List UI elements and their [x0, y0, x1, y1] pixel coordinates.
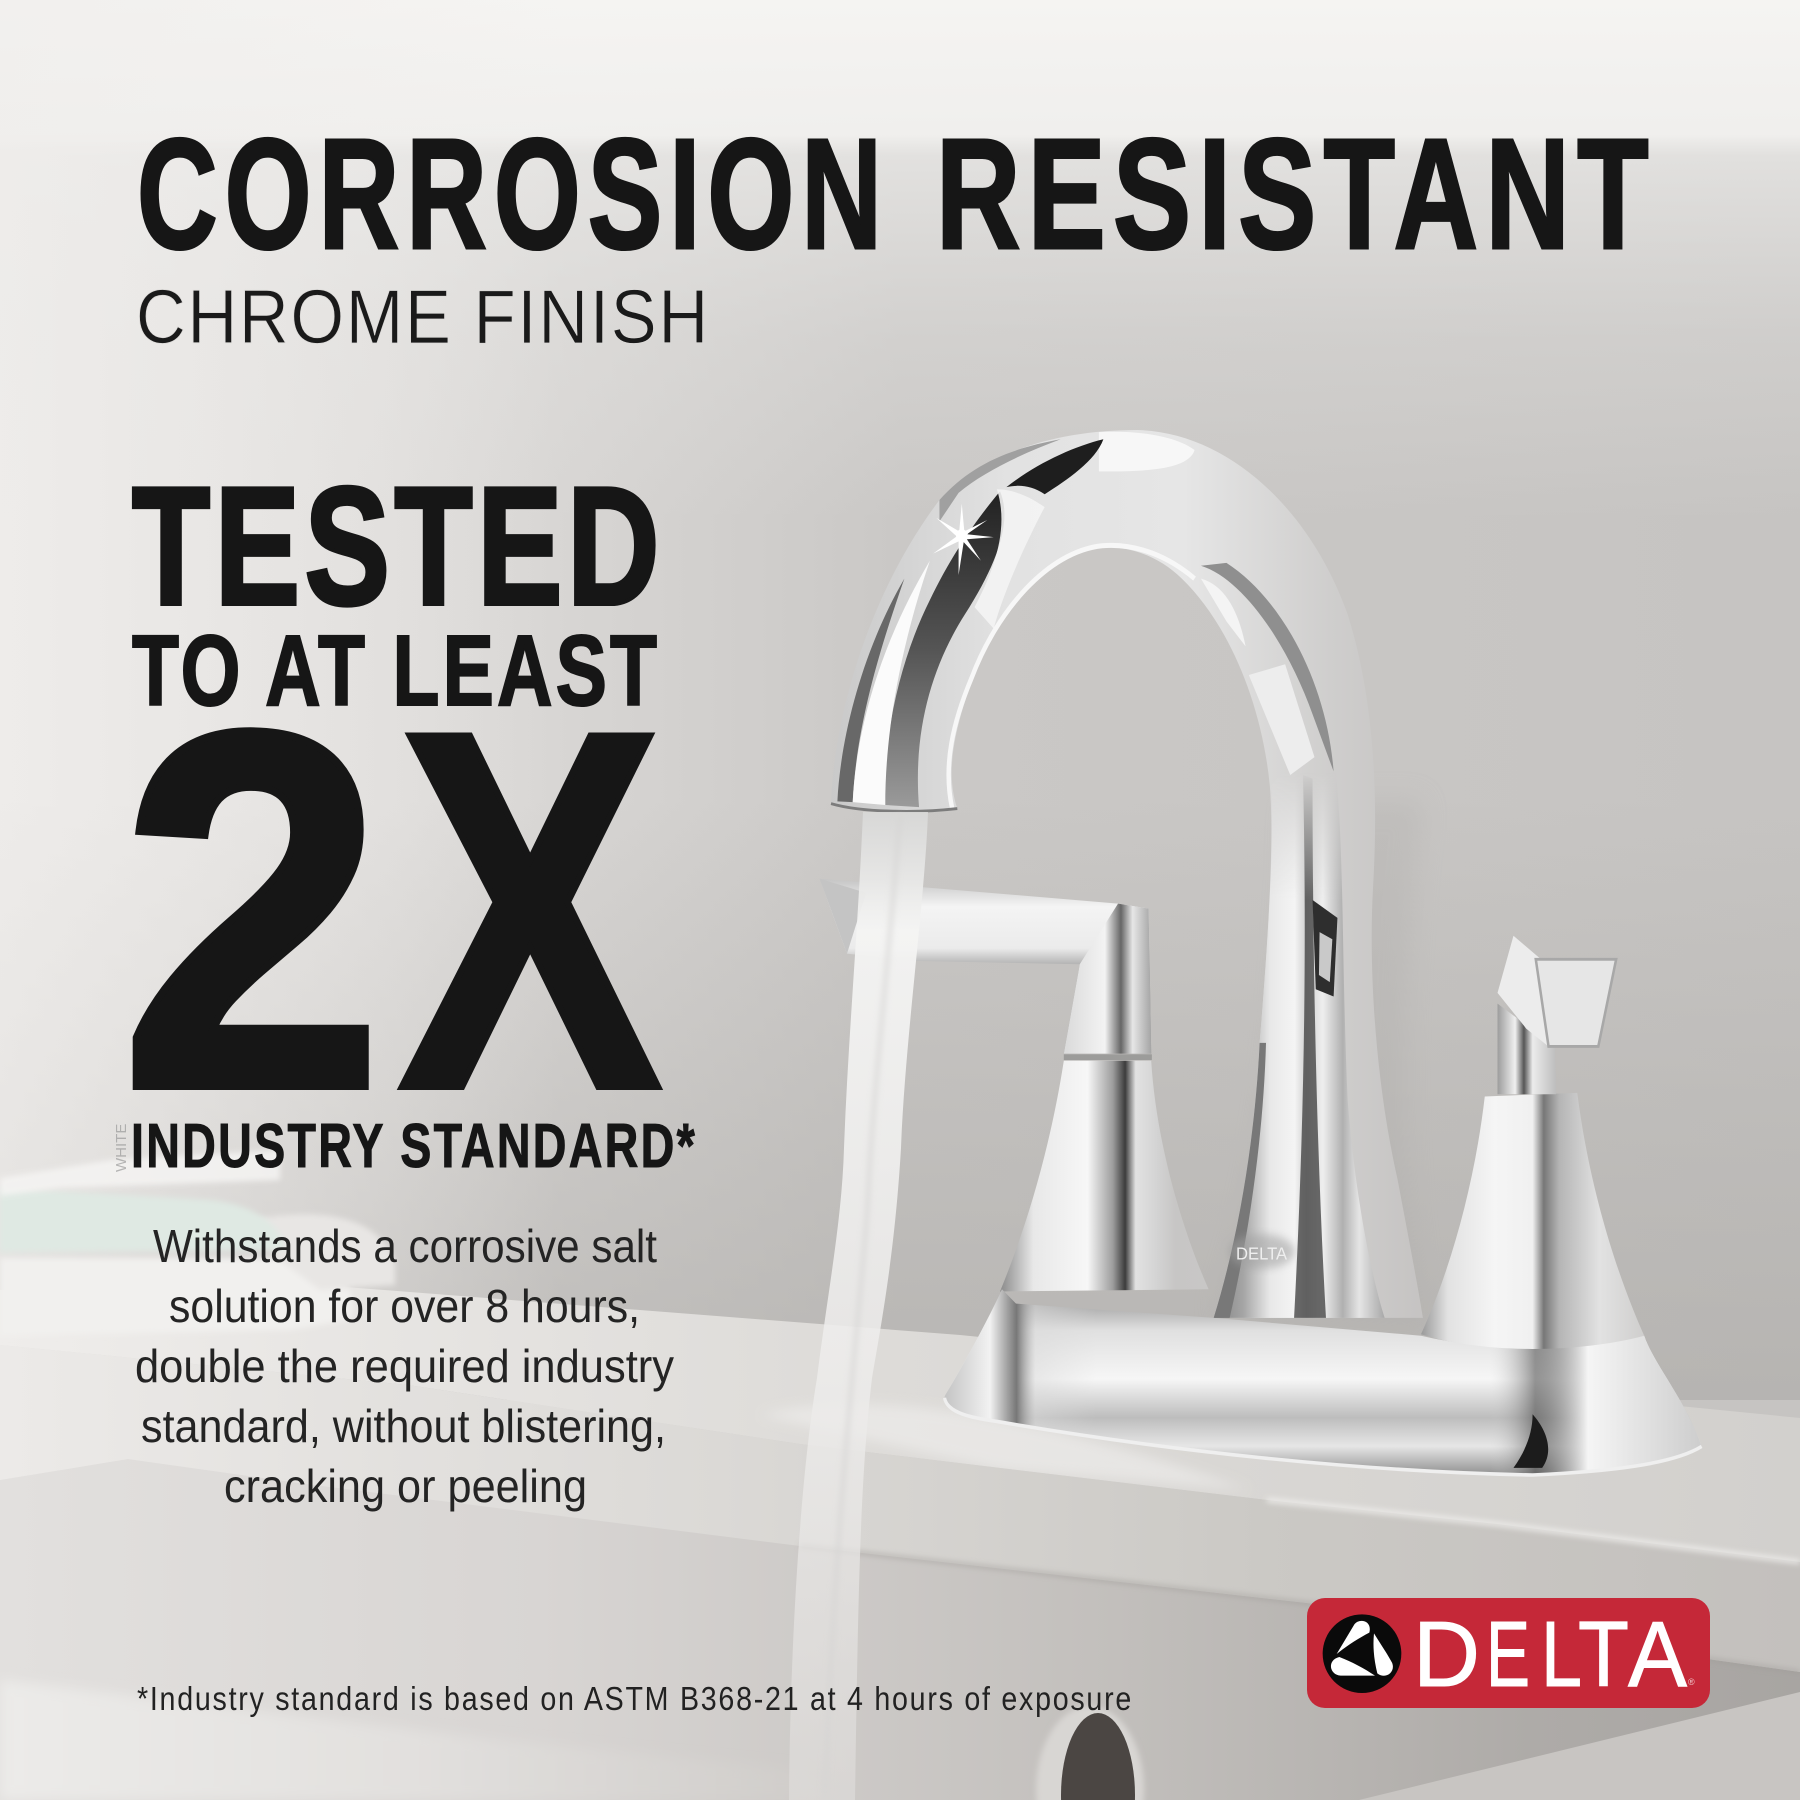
sink body: [0, 1459, 1800, 1800]
footnote: *Industry standard is based on ASTM B368-21 at 4 hours of exposure: [137, 1680, 1133, 1717]
logo: Delta: ®: [1688, 1677, 1695, 1687]
body description: Withstands a corrosive salt: [153, 1220, 657, 1272]
title: corrosion resistant: [137, 107, 1656, 282]
claim: tested: TESTED: [132, 452, 664, 640]
body description: cracking or peeling: [224, 1460, 587, 1512]
body description: solution for over 8 hours,: [169, 1280, 640, 1332]
base plate: [945, 1289, 1702, 1475]
toothbrush: [0, 1188, 285, 1252]
wordmark: L: [1541, 1602, 1582, 1706]
wordmark: A: [1628, 1602, 1687, 1706]
claim: 2X: [120, 626, 663, 1194]
wordmark: D: [1413, 1602, 1480, 1706]
centre column: [1214, 757, 1385, 1318]
sparkle on spout: [933, 504, 994, 575]
left handle: [820, 879, 1209, 1291]
subtitle: chrome finish: CHROME FINISH: [136, 275, 710, 360]
claim: 2X: X: [399, 626, 663, 1194]
faucet brand mark: DELTA: [1236, 1245, 1287, 1264]
drain overflow: [1036, 1706, 1144, 1800]
logo: Delta: [1307, 1598, 1710, 1708]
faucet: [820, 430, 1702, 1475]
body description: double the required industry: [135, 1340, 674, 1392]
wordmark: [1413, 1602, 1687, 1706]
icon: Delta triangle mark: [1323, 1614, 1401, 1693]
towel: [0, 1258, 353, 1336]
counter front lip: [0, 1345, 1800, 1672]
wordmark: E: [1486, 1602, 1530, 1706]
claim: industry standard: INDUSTRY STANDARD*: [131, 1112, 697, 1181]
water stream: [789, 812, 928, 1800]
claim: to at least: TO AT LEAST: [132, 615, 660, 727]
bowl reflections: [0, 1680, 830, 1800]
claim: 2X: 2: [120, 626, 384, 1194]
body description: standard, without blistering,: [141, 1400, 666, 1452]
right handle: [1421, 936, 1644, 1349]
faucet shadow on wall: [1214, 800, 1431, 1329]
wordmark: T: [1578, 1602, 1629, 1706]
body description: [135, 1220, 674, 1512]
background photo: bathroom wall and vanity: WHITE: [113, 1124, 130, 1172]
countertop surface: [0, 1285, 1800, 1562]
title: corrosion resistant: CORROSION: [137, 107, 889, 282]
spout arch: [831, 430, 1423, 1318]
